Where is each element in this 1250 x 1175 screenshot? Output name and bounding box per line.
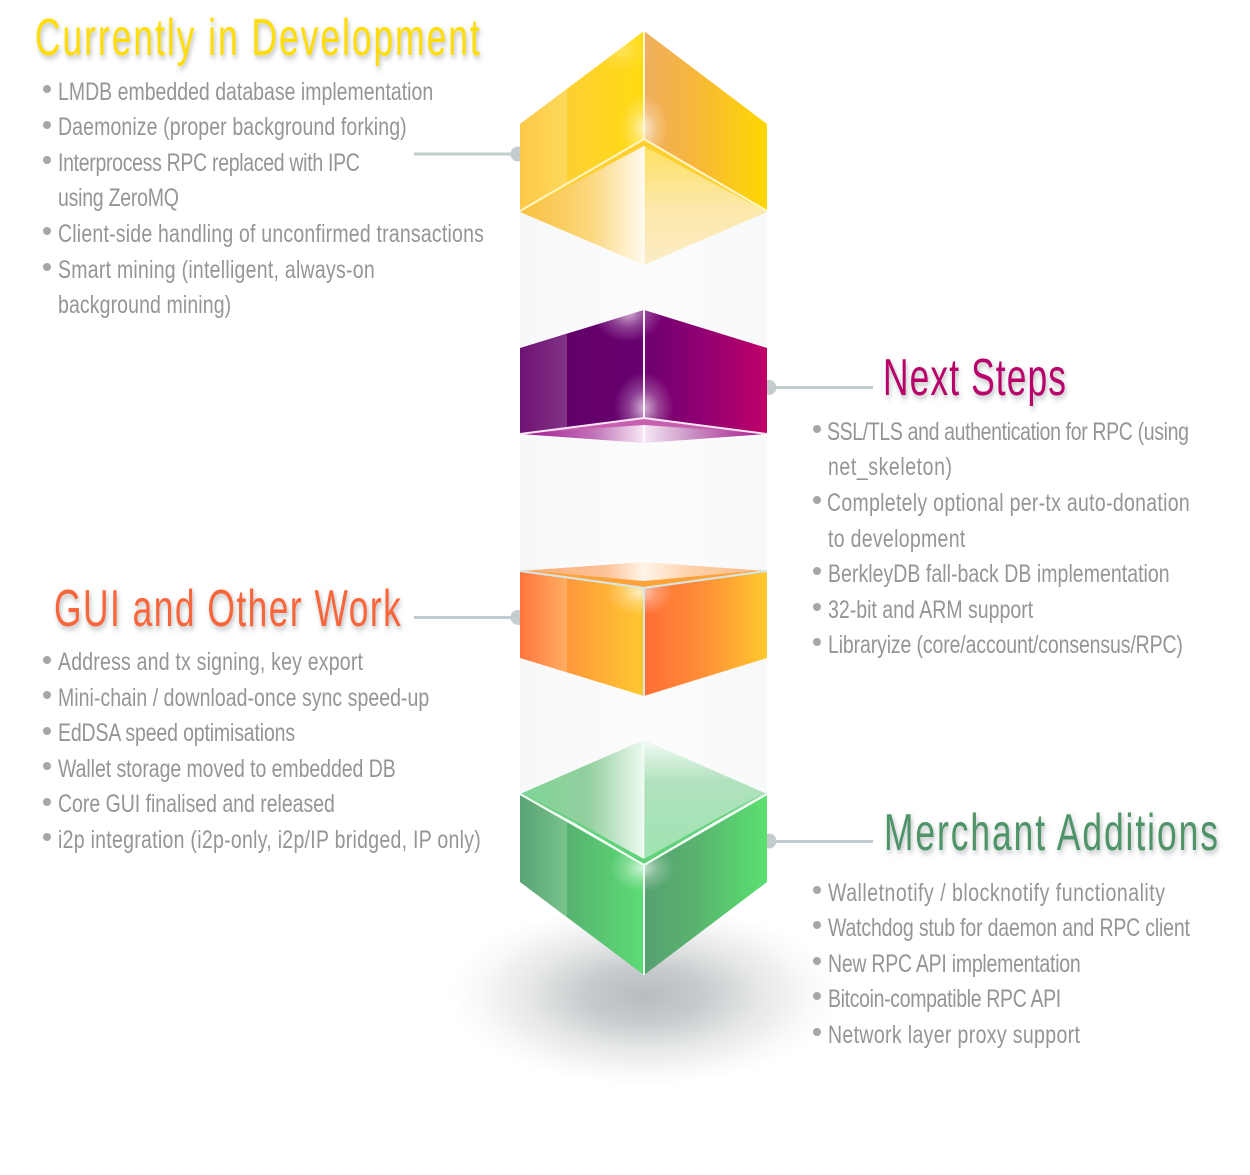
list: currently in development items: LMDB embedded database implementation xyxy=(58,78,433,106)
list: merchant additions items xyxy=(813,879,1191,1049)
list: currently in development items: Smart mining (intelligent, always-on xyxy=(58,256,375,284)
list: currently in development items: background mining) xyxy=(58,291,231,319)
connector: currently in development xyxy=(414,146,526,162)
list: next steps items: net_skeleton) xyxy=(828,453,952,481)
list: next steps items: SSL/TLS and authentication for RPC (using xyxy=(827,418,1189,446)
list: next steps items xyxy=(813,418,1190,659)
connector: gui and other work xyxy=(414,610,526,625)
list: gui and other work items: Mini-chain / download-once sync speed-up xyxy=(58,684,429,712)
list: currently in development items: Client-side handling of unconfirmed transactions xyxy=(58,220,484,248)
list: gui and other work items: Wallet storage moved to embedded DB xyxy=(58,755,396,783)
list: merchant additions items: New RPC API implementation xyxy=(828,950,1081,978)
list: merchant additions items: Watchdog stub for daemon and RPC client xyxy=(828,914,1191,942)
heading: currently in development: Currently in Development xyxy=(35,9,480,67)
heading: next steps: Next Steps xyxy=(883,349,1066,407)
list: next steps items: Libraryize (core/account/consensus/RPC) xyxy=(828,631,1183,659)
list: gui and other work items: Address and tx signing, key export xyxy=(58,648,364,676)
list: merchant additions items: Walletnotify / blocknotify functionality xyxy=(828,879,1166,907)
yellow cube xyxy=(520,28,767,265)
panel: gui and other work xyxy=(43,580,481,854)
panel: currently in development xyxy=(35,9,484,319)
list: merchant additions items: Bitcoin-compatible RPC API xyxy=(828,985,1061,1013)
orange cube xyxy=(520,562,767,696)
floor shadow xyxy=(449,903,839,1087)
list: currently in development items xyxy=(43,78,484,319)
list: gui and other work items: i2p integration (i2p-only, i2p/IP bridged, IP only) xyxy=(58,826,481,854)
list: next steps items: to development xyxy=(828,525,966,553)
panel: merchant additions xyxy=(813,804,1218,1049)
heading: merchant additions: Merchant Additions xyxy=(884,804,1218,862)
purple cube xyxy=(520,310,767,443)
background column behind cubes xyxy=(520,205,767,805)
list: currently in development items: Daemonize (proper background forking) xyxy=(58,113,407,141)
list: gui and other work items xyxy=(43,648,481,854)
list: next steps items: Completely optional per-tx auto-donation xyxy=(827,489,1190,517)
list: gui and other work items: Core GUI finalised and released xyxy=(58,790,335,818)
list: currently in development items: using ZeroMQ xyxy=(58,184,179,212)
list: next steps items: 32-bit and ARM support xyxy=(828,596,1034,624)
list: next steps items: BerkleyDB fall-back DB implementation xyxy=(828,560,1170,588)
panel: next steps xyxy=(813,349,1190,659)
heading: gui and other work: GUI and Other Work xyxy=(54,580,401,638)
green cube xyxy=(520,740,767,975)
list: merchant additions items: Network layer proxy support xyxy=(828,1021,1081,1049)
connector: merchant additions xyxy=(762,834,873,848)
list: currently in development items: Interprocess RPC replaced with IPC xyxy=(58,149,360,177)
connector: next steps xyxy=(762,380,873,395)
list: gui and other work items: EdDSA speed optimisations xyxy=(58,719,295,747)
